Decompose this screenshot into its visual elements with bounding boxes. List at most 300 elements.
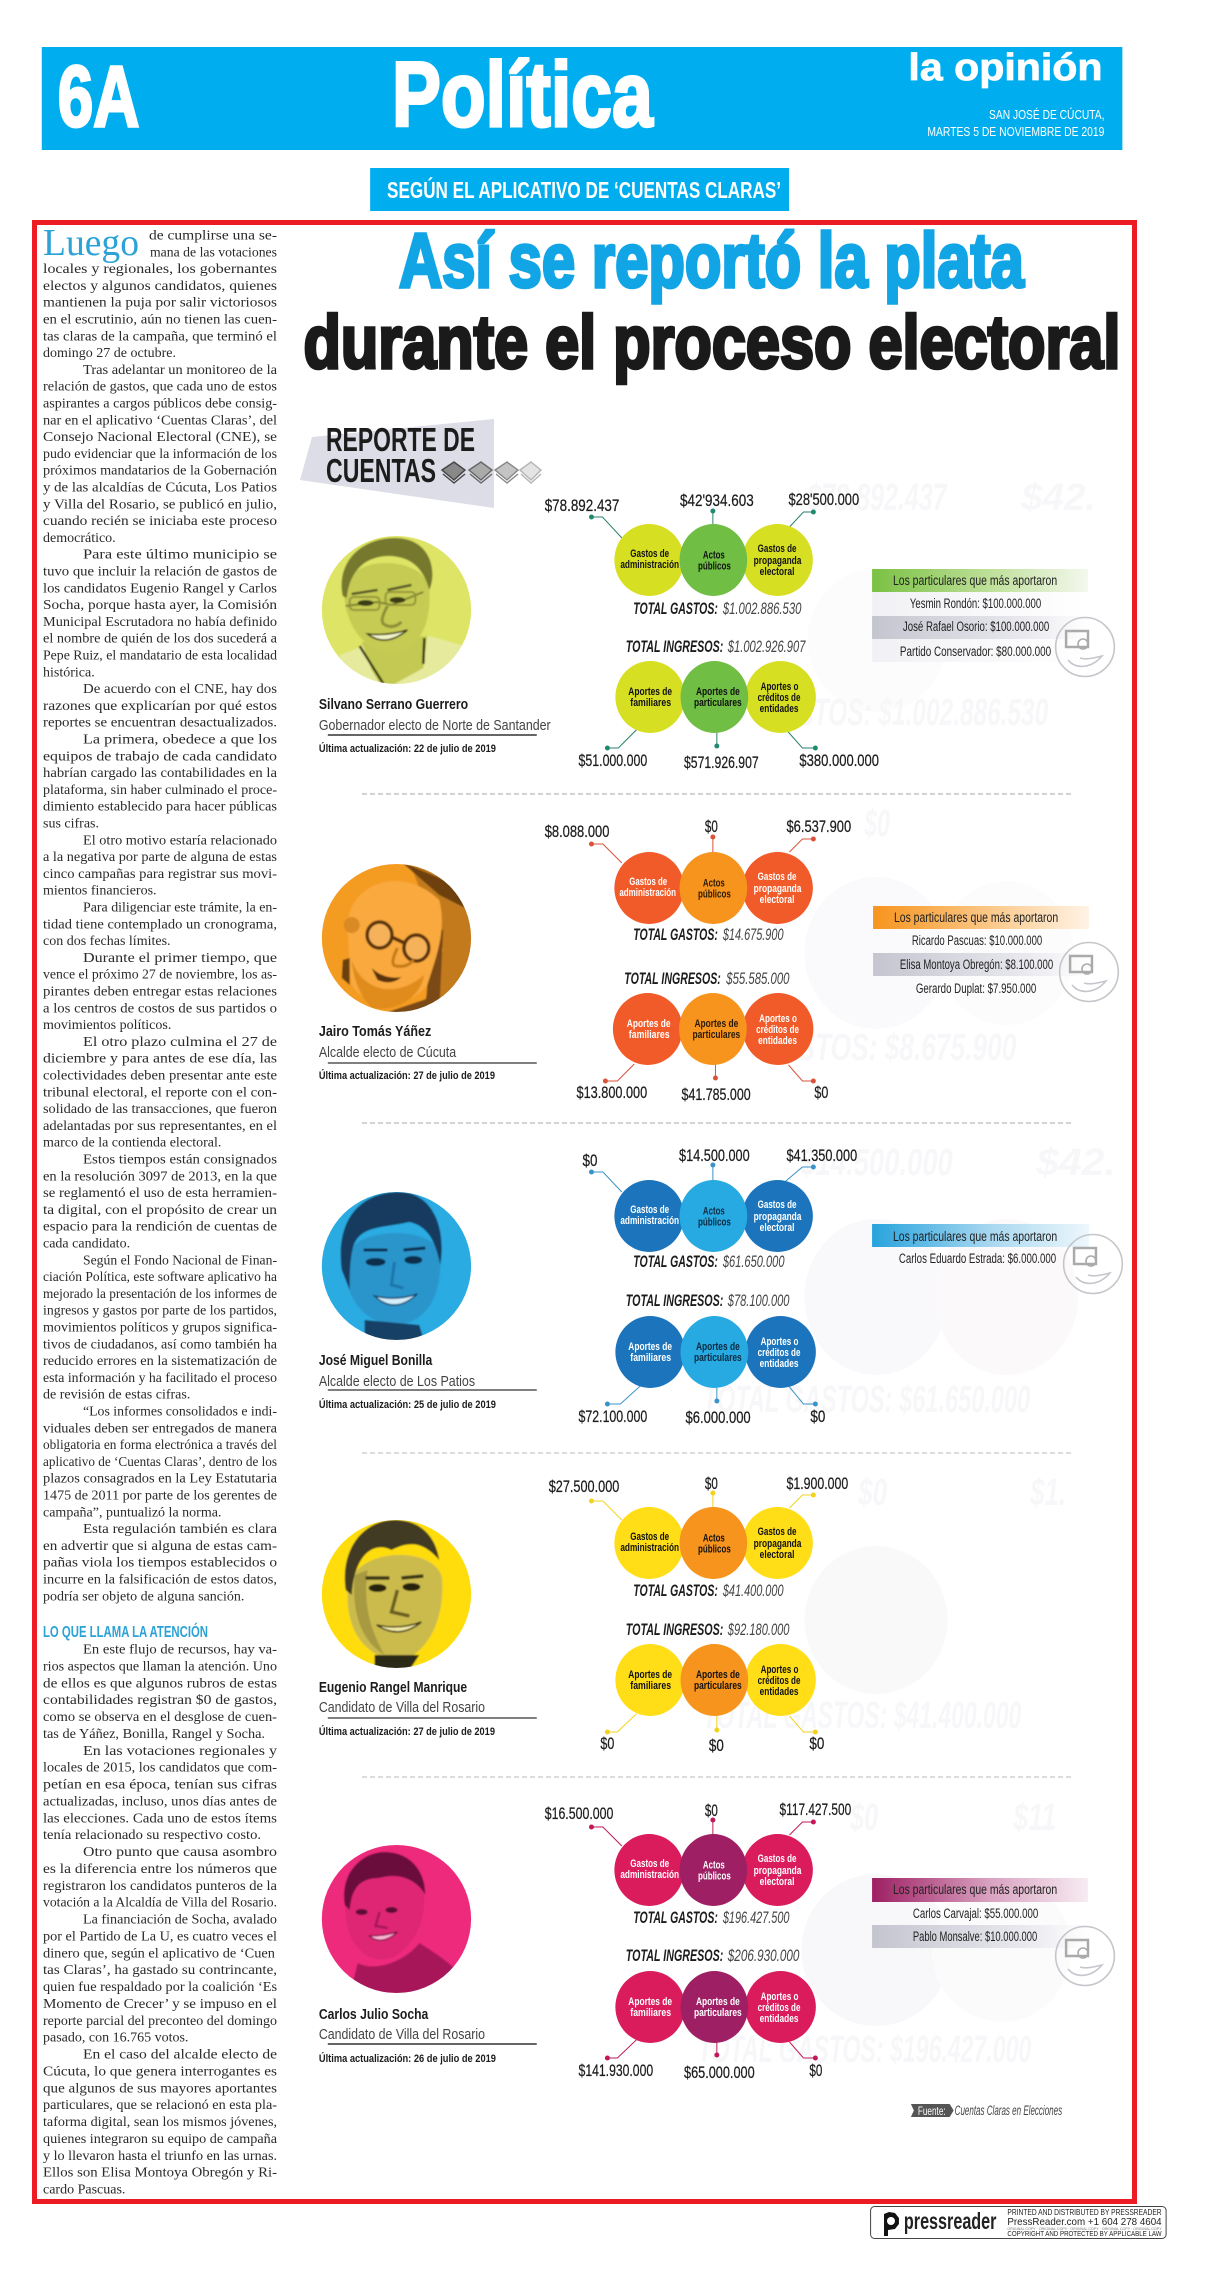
paragraph 4: De acuerdo con el CNE, hay dos (83, 682, 277, 697)
paragraph 18: que algunos de sus mayores aportantes (43, 2081, 277, 2096)
paragraph 16 (43, 1845, 278, 1911)
income bubbles: créditos de (756, 1024, 799, 1036)
income bubbles: Aportes de (628, 686, 672, 698)
expense bubbles: públicos (698, 888, 731, 901)
paragraph 1: en el escrutinio, aún no tienen las cuen- (43, 312, 277, 328)
paragraph 9: El otro plazo culmina el 27 de (83, 1035, 277, 1050)
paragraph 2: aspirantes a cargos públicos debe consig- (43, 396, 277, 412)
portrait (320, 1190, 474, 1342)
totals: TOTAL GASTOS: (633, 599, 718, 618)
income bubbles (615, 1971, 816, 2043)
paragraph 12: obligatoria en forma electrónica a través del (43, 1438, 277, 1453)
paragraph 15: petían en esa época, tenían sus cifras (43, 1778, 277, 1792)
amounts: $0 (809, 1734, 824, 1753)
paragraph 17: pasado, con 16.765 votos. (43, 2031, 188, 2046)
paragraph 5: La primera, obedece a que los (83, 732, 277, 748)
paragraph 9: adelantadas por sus representantes, en el (43, 1119, 277, 1134)
print notice: PRINTED AND DISTRIBUTED BY PRESSREADER (1007, 2208, 1162, 2217)
income bubbles: particulares (694, 1352, 742, 1364)
role: Alcalde electo de Los Patios (319, 1373, 475, 1390)
paragraph 11: movimientos políticos y grupos significa- (43, 1320, 277, 1336)
divider (362, 793, 1071, 795)
totals: $55.585.000 (726, 969, 790, 988)
paragraph 8: a los centros de costos de sus partidos o (43, 1001, 277, 1016)
amounts: $13.800.000 (577, 1083, 647, 1102)
expense bubbles: propaganda (754, 1538, 802, 1550)
candidate 3: José Miguel Bonilla (319, 1146, 1122, 1427)
paragraph 4: razones que explicarían por qué estos (43, 699, 277, 714)
paragraph 3: el nombre de quién de los dos sucederá a (43, 632, 278, 647)
last update: Última actualización: 22 de julio de 2019 (319, 742, 496, 755)
totals: TOTAL GASTOS: (633, 1581, 718, 1600)
faint ghost watermarks: $42. (1020, 477, 1096, 519)
expense bubbles: electoral (760, 566, 794, 578)
expense bubbles: electoral (760, 1549, 794, 1561)
paragraph 9: colectividades deben presentar ante este (43, 1068, 277, 1084)
paragraph 1: de cumplirse una se- (149, 228, 277, 244)
expense bubbles (614, 1834, 813, 1906)
paragraph 6: mientos financieros. (43, 884, 157, 899)
source note (911, 2102, 1062, 2118)
paragraph 2: Tras adelantar un monitoreo de la (83, 363, 278, 378)
income bubbles: Aportes o (761, 1991, 799, 2003)
paragraph 2: relación de gastos, que cada uno de estos (43, 380, 277, 395)
connectors (589, 834, 816, 1084)
amounts: $0 (705, 1474, 718, 1493)
expense bubbles: administración (620, 559, 679, 571)
amounts (579, 1146, 857, 1427)
expense bubbles (614, 1507, 813, 1579)
name: Jairo Tomás Yáñez (319, 1023, 431, 1040)
expense bubbles: administración (619, 887, 676, 899)
paragraph 3: Municipal Escrutadora no había definido (43, 615, 277, 630)
paragraph 2: nar en el aplicativo ‘Cuentas Claras’, del (43, 413, 277, 428)
income bubbles: Aportes de (628, 1996, 672, 2008)
paragraph 3: Para este último municipio se (83, 548, 277, 563)
totals: $61.650.000 (722, 1252, 785, 1271)
paragraph 18: cardo Pascuas. (43, 2182, 125, 2198)
faint ghost watermarks: $11 (1013, 1797, 1056, 1839)
income bubbles: Aportes o (761, 681, 799, 693)
paragraph 11: Según el Fondo Nacional de Finan- (83, 1253, 277, 1268)
totals: TOTAL GASTOS: (633, 1908, 718, 1927)
expense bubbles: públicos (698, 1216, 731, 1229)
expense bubbles: propaganda (754, 555, 802, 567)
totals: $196.427.500 (722, 1908, 790, 1927)
amounts: $571.926.907 (684, 753, 759, 772)
paragraph 11 (43, 1253, 278, 1403)
role: Gobernador electo de Norte de Santander (319, 717, 551, 734)
paragraph 11: de revisión de estas cifras. (43, 1388, 190, 1403)
paragraph 11: ingresos y gastos por parte de los partidos, (43, 1304, 277, 1319)
divider (362, 1122, 1071, 1124)
connectors (589, 1162, 818, 1406)
expense bubbles (614, 524, 813, 596)
totals: $1.002.926.907 (727, 637, 806, 656)
expense bubbles: Gastos de (758, 871, 796, 883)
subheading: LO QUE LLAMA LA ATENCIÓN (43, 1622, 208, 1641)
faint ghost watermarks: STOS: $1.002.886.530 (797, 692, 1048, 734)
paragraph 13 (43, 1522, 278, 1604)
amounts: $117.427.500 (780, 1800, 851, 1819)
candidate 2: Jairo Tomás Yáñez (319, 817, 1118, 1104)
paragraph 18: particulares, que se relacionó en esta pla- (43, 2098, 277, 2113)
income bubbles: entidades (760, 703, 798, 715)
paragraph 8: vence el próximo 27 de noviembre, los as- (43, 968, 277, 983)
paragraph 15 (43, 1744, 277, 1843)
paragraph 15: locales de 2015, los candidatos que com- (43, 1761, 277, 1776)
paragraph 11: esta información y ha facilitado el proceso (43, 1371, 277, 1386)
paragraph 3: Socha, porque hasta ayer, la Comisión (43, 598, 277, 613)
paragraph 8: pirantes deben entregar estas relaciones (43, 984, 277, 1000)
expense bubbles: administración (620, 1869, 679, 1881)
paragraph 18: taforma digital, sean los mismos jóvenes, (43, 2115, 277, 2130)
top donors panel (872, 569, 1114, 676)
icon: money stacks (442, 462, 541, 483)
paragraph 12: 1475 de 2011 por parte de los gerentes de (43, 1488, 277, 1504)
source note: Cuentas Claras en Elecciones (955, 2102, 1062, 2118)
amounts: $65.000.000 (684, 2063, 755, 2082)
totals (626, 1252, 790, 1310)
top donors panel: Carlos Eduardo Estrada: $6.000.000 (899, 1250, 1056, 1266)
paragraph 8: Durante el primer tiempo, que (83, 951, 277, 966)
income bubbles: Aportes de (628, 1669, 672, 1681)
expense bubbles: Actos (703, 1205, 725, 1218)
paragraph 13: Esta regulación también es clara (83, 1522, 278, 1537)
paragraph 2: democrático. (43, 531, 116, 546)
paragraph 8: movimientos políticos. (43, 1018, 171, 1033)
amounts: $6.000.000 (686, 1408, 751, 1427)
paragraph 3: tuvo que incluir la relación de gastos de (43, 564, 277, 580)
section name: Política (392, 44, 653, 146)
paragraph 1 (43, 228, 277, 361)
top donors panel (872, 1878, 1114, 1986)
paragraph 1: locales y regionales, los gobernantes (43, 262, 277, 277)
top donors panel: Partido Conservador: $80.000.000 (900, 643, 1051, 659)
paragraph 12: plazos consagrados en la Ley Estatutaria (43, 1472, 278, 1487)
paragraph 16: votación a la Alcaldía de Villa del Rosario. (43, 1896, 277, 1911)
print notice: COPYRIGHT AND PROTECTED BY APPLICABLE LAW (1007, 2231, 1162, 2238)
paragraph 13: pañas viola los tiempos establecidos o (43, 1556, 277, 1571)
income bubbles: Aportes o (761, 1664, 799, 1676)
totals: $1.002.886.530 (722, 599, 802, 618)
section label: reporte de cuentas: REPORTE DE (326, 421, 475, 458)
faint ghost watermarks: $42. (1035, 1142, 1116, 1184)
paragraph 7 (43, 900, 277, 949)
amounts: $0 (705, 817, 718, 836)
paragraph 18: quienes integraron su equipo de campaña (43, 2132, 278, 2147)
income bubbles: familiares (629, 1029, 670, 1041)
expense bubbles: Gastos de (629, 876, 667, 888)
paragraph 17: dinero que, según el aplicativo de ‘Cuen (43, 1946, 275, 1961)
top donors panel (872, 1224, 1122, 1294)
paragraph 1: domingo 27 de octubre. (43, 346, 176, 361)
portrait (322, 536, 472, 684)
paragraph 1: electos y algunos candidatos, quienes (43, 279, 277, 294)
paragraph 18: y lo llevaron hasta el triunfo en las urnas. (43, 2149, 277, 2164)
paragraph 3: los candidatos Eugenio Rangel y Carlos (43, 581, 277, 596)
name: Eugenio Rangel Manrique (319, 1679, 467, 1696)
paragraph 17: La financiación de Socha, avalado (83, 1912, 277, 1928)
paragraph 7: tidad tiene contemplado un cronograma, (43, 917, 277, 932)
top donors panel: Gerardo Duplat: $7.950.000 (916, 980, 1036, 996)
expense bubbles: electoral (760, 894, 794, 906)
paragraph 4 (43, 682, 277, 731)
expense bubbles: públicos (698, 1870, 731, 1883)
top donors panel: Elisa Montoya Obregón: $8.100.000 (900, 956, 1053, 972)
income bubbles: Aportes o (759, 1013, 797, 1025)
income bubbles: Aportes de (628, 1341, 672, 1353)
dateline: MARTES 5 DE NOVIEMBRE DE 2019 (927, 124, 1104, 139)
paragraph 2: y Villa del Rosario, se publicó en julio, (43, 497, 277, 512)
amounts: $72.100.000 (579, 1407, 647, 1426)
top donors panel: Yesmin Rondón: $100.000.000 (910, 595, 1041, 611)
expense bubbles: Gastos de (630, 1204, 669, 1216)
paragraph 11: mejorado la presentación de los informes de (43, 1287, 277, 1302)
paragraph 15: las elecciones. Cada uno de estos ítems (43, 1811, 277, 1826)
expense bubbles: electoral (760, 1876, 794, 1888)
paragraph 5 (43, 732, 278, 832)
income bubbles: familiares (630, 697, 671, 709)
amounts: $8.088.000 (545, 822, 609, 841)
paragraph 6: cinco campañas para registrar sus movi- (43, 867, 277, 882)
paragraph 10: en la resolución 3097 de 2013, en la que (43, 1169, 277, 1184)
paragraph 9: diciembre y para antes de ese día, las (43, 1052, 277, 1067)
income bubbles (613, 993, 813, 1065)
paragraph 17: quien fue respaldado por la coalición ‘Es (43, 1980, 277, 1995)
dateline: SAN JOSÉ DE CÚCUTA, (989, 107, 1104, 122)
amounts: $0 (814, 1083, 828, 1102)
expense bubbles: Gastos de (758, 1199, 796, 1211)
expense bubbles: Gastos de (630, 1531, 669, 1543)
candidate 5: Carlos Julio Socha (319, 1800, 1114, 2082)
paragraph 2 (43, 363, 278, 546)
paragraph 12: “Los informes consolidados e indi- (83, 1404, 277, 1420)
section label: reporte de cuentas: CUENTAS (326, 452, 436, 489)
income bubbles: particulares (694, 1680, 742, 1692)
paragraph 7: Para diligenciar este trámite, la en- (83, 900, 277, 916)
income bubbles: particulares (694, 697, 742, 709)
paragraph 3 (43, 548, 278, 680)
income bubbles: Aportes de (627, 1018, 671, 1030)
newspaper logo: la opinión (908, 47, 1102, 89)
income bubbles: familiares (630, 1352, 671, 1364)
paragraph 15: En las votaciones regionales y (83, 1744, 277, 1759)
faint ghost watermarks: $78.892.437 (807, 477, 948, 519)
connectors (589, 1490, 818, 1734)
name: Carlos Julio Socha (319, 2006, 429, 2023)
paragraph 18: Cúcuta, lo que genera interrogantes es (43, 2064, 277, 2079)
top donors panel: Los particulares que más aportaron (893, 1881, 1057, 1897)
paragraph 17: por el Partido de La U, es cuatro veces el (43, 1929, 277, 1944)
totals (626, 1581, 790, 1639)
connectors (589, 1818, 818, 2060)
divider (362, 1452, 1071, 1454)
top donors panel (873, 906, 1118, 1002)
pressreader footer (871, 2206, 1166, 2238)
amounts: $28'500.000 (788, 490, 859, 509)
role: Candidato de Villa del Rosario (319, 2026, 485, 2043)
paragraph 5: habrían cargado las contabilidades en la (43, 766, 278, 781)
paragraph 12: aplicativo de ‘Cuentas Claras’, dentro de los (43, 1455, 277, 1470)
paragraph 9: marco de la contienda electoral. (43, 1136, 221, 1151)
amounts (549, 1474, 848, 1755)
top donors panel: Los particulares que más aportaron (893, 572, 1057, 588)
dateline (927, 107, 1104, 139)
icon: hand with cash (1056, 618, 1114, 676)
paragraph 1: mantienen la puja por salir victoriosos (43, 296, 277, 311)
expense bubbles: Actos (703, 1859, 725, 1872)
expense bubbles: públicos (698, 560, 731, 573)
name: José Miguel Bonilla (319, 1352, 433, 1369)
expense bubbles: propaganda (754, 1211, 802, 1223)
expense bubbles: Gastos de (630, 548, 669, 560)
icon: hand with cash (1056, 1926, 1114, 1986)
paragraph 2: y de las alcaldías de Cúcuta, Los Patios (43, 480, 277, 496)
income bubbles: familiares (630, 2007, 671, 2019)
top donors panel: Los particulares que más aportaron (893, 1228, 1057, 1244)
last update: Última actualización: 25 de julio de 2019 (319, 1398, 496, 1411)
article text column (43, 222, 278, 2198)
paragraph 14: En este flujo de recursos, hay va- (83, 1642, 277, 1658)
amounts: $0 (583, 1151, 597, 1170)
paragraph 10: cada candidato. (43, 1236, 130, 1252)
source note: Fuente: (918, 2104, 946, 2118)
expense bubbles: Gastos de (758, 1853, 796, 1865)
portrait (320, 1843, 474, 1995)
paragraph 17: Momento de Crecer’ y se impuso en el (43, 1997, 277, 2012)
paragraph 14: contabilidades registran $0 de gastos, (43, 1693, 277, 1708)
top donors panel: Ricardo Pascuas: $10.000.000 (912, 932, 1042, 948)
paragraph 9: solidado de las transacciones, que fueron (43, 1102, 277, 1117)
expense bubbles: administración (620, 1215, 679, 1227)
expense bubbles: Actos (703, 1532, 725, 1545)
paragraph 13: podría ser objeto de alguna sanción. (43, 1589, 244, 1604)
paragraph 16: es la diferencia entre los números que (43, 1862, 277, 1877)
faint ghost watermarks: $1. (1030, 1472, 1066, 1514)
paragraph 17 (43, 1912, 277, 2046)
paragraph 14: como se observa en el desglose de cuen- (43, 1710, 277, 1725)
income bubbles (615, 1316, 816, 1388)
faint ghost watermarks: TOTAL GASTOS: $41.400.000 (703, 1695, 1021, 1737)
paragraph 16: registraron los candidatos punteros de la (43, 1879, 278, 1894)
amounts: $41.350.000 (787, 1146, 857, 1165)
paragraph 4: reportes se encuentran desactualizados. (43, 716, 277, 731)
paragraph 9 (43, 1035, 277, 1151)
kicker banner (370, 168, 789, 211)
paragraph 12: campaña”, puntualizó la norma. (43, 1505, 221, 1520)
expense bubbles: Gastos de (630, 1858, 669, 1870)
paragraph 2: próximos mandatarios de la Gobernación (43, 464, 277, 479)
amounts: $141.930.000 (579, 2061, 653, 2080)
print notice: PressReader.com +1 604 278 4604 (1007, 2217, 1162, 2228)
main title: Así se reportó la plata (399, 218, 1025, 304)
paragraph 2: cuando recién se iniciaba este proceso (43, 514, 277, 529)
portrait (320, 860, 474, 1015)
totals: $92.180.000 (727, 1620, 790, 1639)
paragraph 14 (43, 1642, 277, 1742)
amounts: $0 (709, 1736, 724, 1755)
expense bubbles (614, 852, 813, 924)
totals: TOTAL GASTOS: (633, 925, 718, 944)
income bubbles: entidades (760, 1358, 798, 1370)
income bubbles: créditos de (758, 2002, 800, 2014)
paragraph 6: El otro motivo estaría relacionado (83, 833, 277, 848)
expense bubbles: Gastos de (758, 543, 796, 555)
paragraph 18: Ellos son Elisa Montoya Obregón y Ri- (43, 2166, 277, 2181)
amounts: $27.500.000 (549, 1477, 619, 1496)
faint ghost watermarks: $0 (857, 1472, 887, 1514)
faint ghost watermarks (698, 477, 1116, 2071)
paragraph 13: incurre en la falsificación de estos datos, (43, 1572, 277, 1588)
top donors panel: Pablo Monsalve: $10.000.000 (913, 1928, 1037, 1944)
expense bubbles: públicos (698, 1543, 731, 1556)
paragraph 2: pudo evidenciar que la información de los (43, 447, 277, 462)
income bubbles: entidades (760, 2013, 798, 2025)
income bubbles: créditos de (758, 1347, 800, 1359)
paragraph 10: espacio para la rendición de cuentas de (43, 1220, 277, 1235)
faint ghost watermarks: TOTAL GASTOS: $61.650.000 (703, 1379, 1030, 1421)
faint ghost watermarks: $0 (864, 803, 890, 845)
divider (362, 1776, 1071, 1778)
paragraph 17: tas Claras’, ha gastado su contrincante, (43, 1963, 277, 1978)
paragraph 11: reducido errores en la sistematización de (43, 1354, 277, 1369)
paragraph 5: dimiento establecido para hacer públicas (43, 800, 277, 815)
income bubbles: Aportes de (696, 1341, 740, 1353)
red article frame (34, 222, 1134, 2202)
paragraph 5: plataforma, sin haber culminado el proce- (43, 783, 277, 798)
totals: TOTAL INGRESOS: (624, 969, 721, 988)
amounts: $78.892.437 (545, 496, 619, 515)
income bubbles: Aportes de (696, 686, 740, 698)
paragraph 16: Otro punto que causa asombro (83, 1845, 277, 1860)
income bubbles: familiares (630, 1680, 671, 1692)
top donors panel: Carlos Carvajal: $55.000.000 (913, 1905, 1038, 1921)
amounts: $0 (600, 1734, 614, 1753)
income bubbles (615, 1644, 816, 1716)
kicker banner: SEGÚN EL APLICATIVO DE ‘CUENTAS CLARAS’ (387, 177, 781, 203)
print notice (1007, 2208, 1162, 2238)
expense bubbles: propaganda (754, 883, 802, 895)
paragraph 2: Consejo Nacional Electoral (CNE), se (43, 430, 277, 445)
paragraph 3: Pepe Ruiz, el mandatario de esta localidad (43, 648, 277, 664)
faint ghost watermarks: $0 (850, 1797, 878, 1839)
totals: $206.930.000 (727, 1946, 800, 1965)
page number: 6A (58, 49, 139, 145)
page header band (42, 44, 1122, 150)
expense bubbles: Actos (703, 877, 725, 890)
paragraph 15: tenía relacionado su respectivo costo. (43, 1828, 261, 1843)
amounts: $380.000.000 (799, 751, 879, 770)
paragraph 14: de ellos es que algunos rubros de estas (43, 1676, 277, 1691)
pressreader footer: pressreader (904, 2208, 997, 2234)
income bubbles: Aportes de (696, 1669, 740, 1681)
expense bubbles: electoral (760, 1222, 794, 1234)
expense bubbles: propaganda (754, 1865, 802, 1877)
amounts: $42'934.603 (680, 491, 754, 510)
amounts: $1.900.000 (787, 1474, 848, 1493)
expense bubbles: Gastos de (758, 1526, 796, 1538)
totals (624, 925, 790, 988)
totals: $41.400.000 (722, 1581, 784, 1600)
income bubbles: créditos de (758, 692, 800, 704)
paragraph 9: tribunal electoral, el reporte con el con- (43, 1085, 277, 1100)
expense bubbles (614, 1180, 813, 1252)
income bubbles: Aportes de (694, 1018, 738, 1030)
amounts: $51.000.000 (579, 751, 647, 770)
paragraph 18: En el caso del alcalde electo de (83, 2048, 277, 2062)
totals: TOTAL GASTOS: (633, 1252, 718, 1271)
